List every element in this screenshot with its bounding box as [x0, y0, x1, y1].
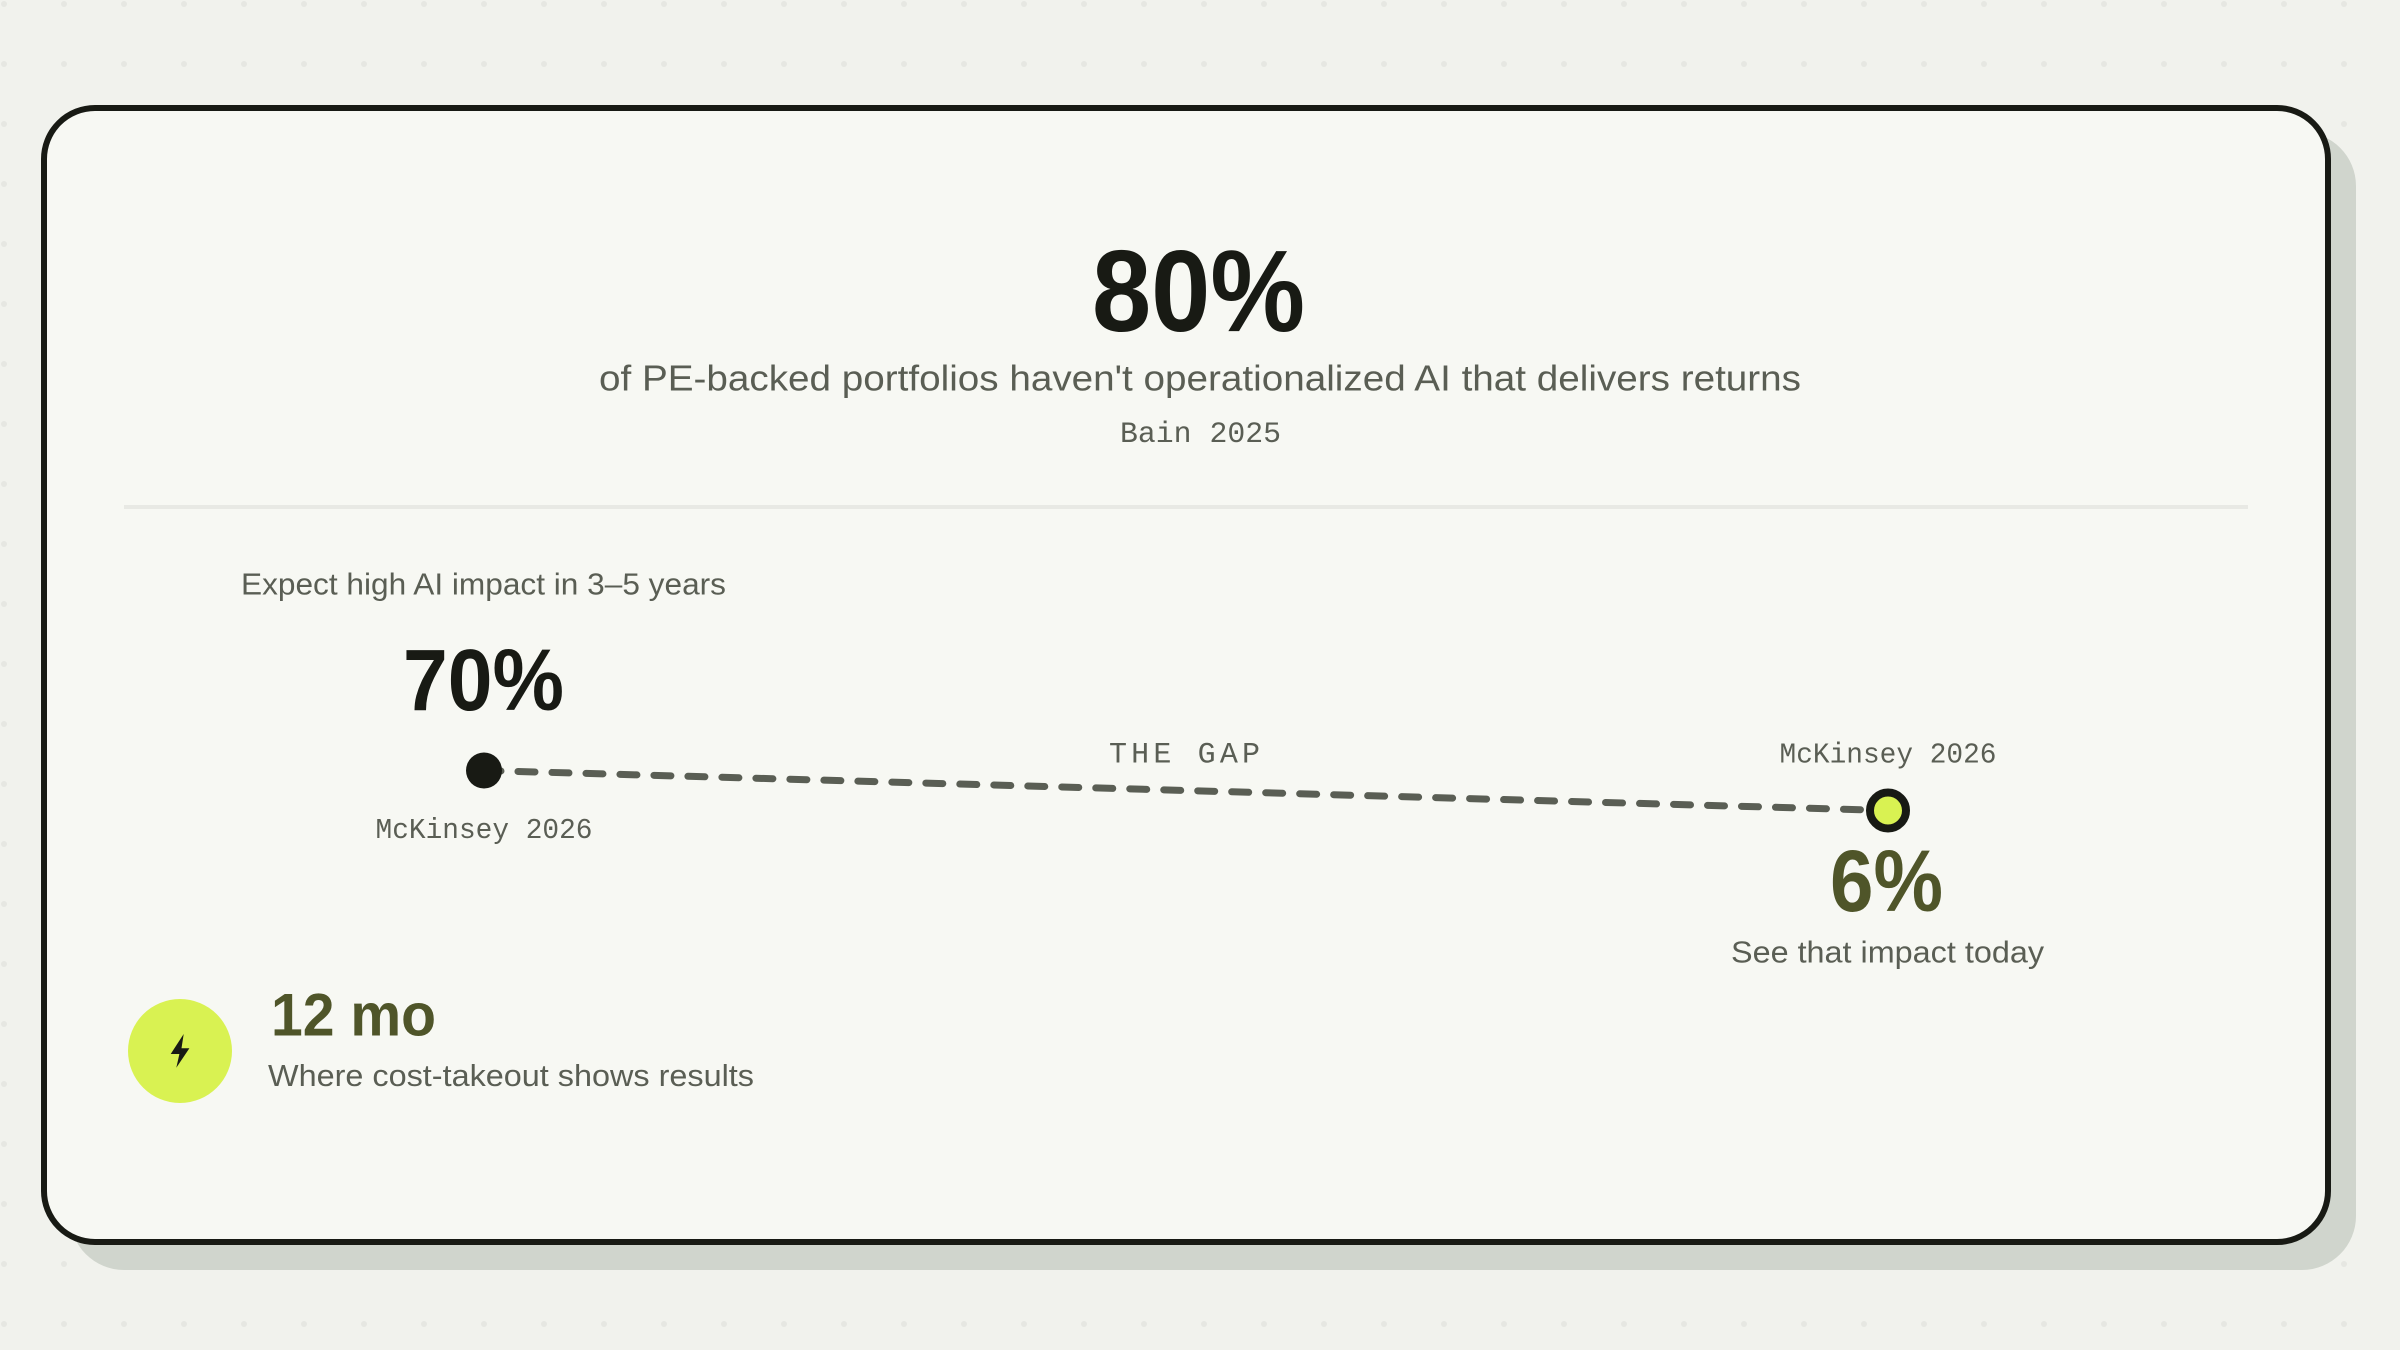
- stat: 6%: 6%: [1830, 833, 1943, 930]
- stat: 12 mo: 12 mo: [271, 982, 436, 1048]
- source: McKinsey right: McKinsey 2026: [1780, 738, 1996, 772]
- label: the gap: THE GAP: [1109, 738, 1260, 772]
- marker: 6% dot: [1870, 792, 1906, 828]
- source: Bain 2025: Bain 2025: [1120, 418, 1281, 452]
- source: McKinsey left: McKinsey 2026: [376, 814, 592, 847]
- gap connector: dashed line: [484, 770, 1888, 810]
- left label: expectation: Expect high AI impact in 3–5 years: [241, 566, 726, 602]
- stat: 70%: 70%: [403, 632, 564, 729]
- marker: 70% dot: [466, 752, 502, 788]
- icon: lightning bolt: [128, 999, 232, 1103]
- headline stat: 80%: 80%: [1092, 226, 1305, 356]
- callout: 12 months: [128, 982, 754, 1103]
- callout description: Where cost-takeout shows results: [268, 1058, 754, 1093]
- headline description: of PE-backed portfolios haven't operationalized AI that delivers returns: [599, 358, 1801, 398]
- card body: [44, 108, 2328, 1242]
- right label: today: See that impact today: [1731, 934, 2045, 970]
